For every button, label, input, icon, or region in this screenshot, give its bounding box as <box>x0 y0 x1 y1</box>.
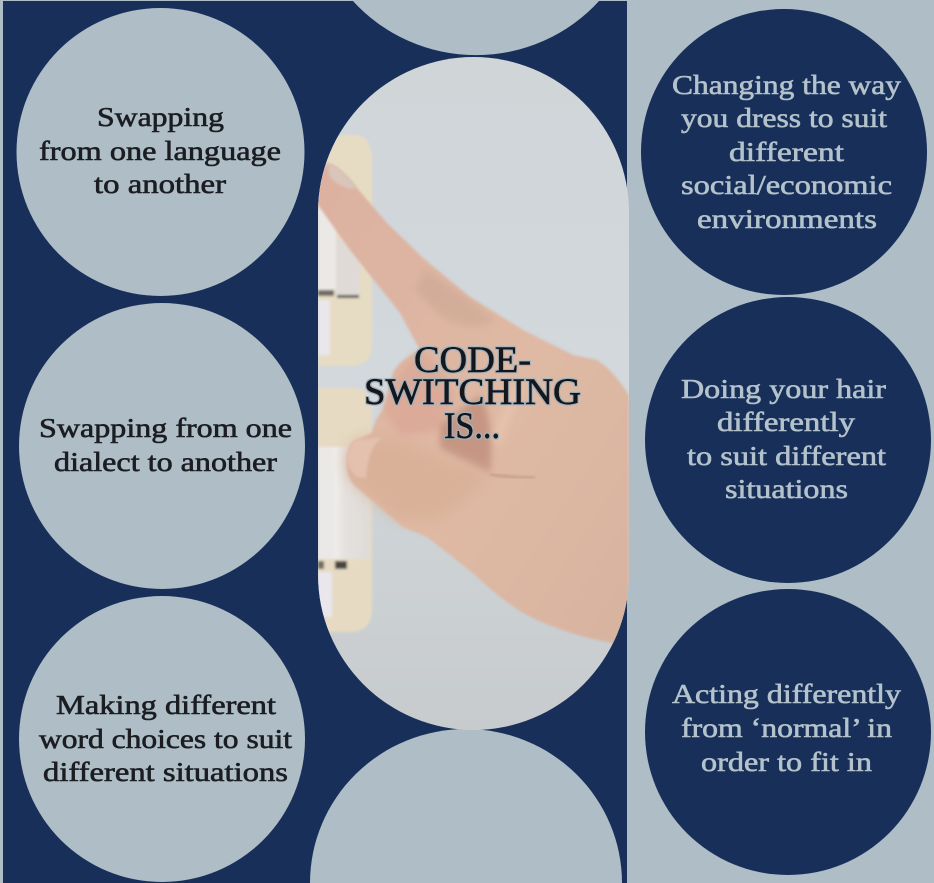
text: language: Swapping <box>97 102 224 132</box>
text: acting <box>672 679 902 777</box>
text: dialect <box>39 413 292 477</box>
text: acting: Acting differently <box>672 679 902 709</box>
title: code-switching is... <box>364 340 581 447</box>
text: language: from one language <box>39 136 281 166</box>
text: word choices: word choices to suit <box>39 724 293 754</box>
panel: navy left background <box>3 1 627 883</box>
title: code-switching is...: IS... <box>444 406 500 447</box>
circle: word choices <box>19 596 305 882</box>
circle: language <box>16 8 304 296</box>
text: hair: differently <box>717 407 856 437</box>
text: dress: environments <box>697 204 877 234</box>
circle: dialect <box>19 303 305 589</box>
decorative circle: bottom <box>310 729 622 883</box>
text: dress: you dress to suit <box>681 103 888 133</box>
text: dress: different <box>729 137 845 167</box>
finger shadows <box>383 352 455 436</box>
title: code-switching is...: SWITCHING <box>364 372 581 413</box>
text: acting: order to fit in <box>701 747 873 777</box>
text: acting: from ‘normal’ in <box>681 713 893 743</box>
circle: dress <box>641 9 927 295</box>
text: dress: Changing the way <box>672 70 902 100</box>
text: word choices: Making different <box>56 690 277 720</box>
text: dress <box>672 70 902 234</box>
decorative circle: top <box>352 0 600 55</box>
text: dialect: Swapping from one <box>39 413 292 443</box>
text: hair <box>681 374 887 504</box>
text: dress: social/economic <box>681 170 892 200</box>
circle: acting <box>645 589 931 875</box>
text: word choices <box>39 690 293 787</box>
text: language: to another <box>94 169 226 199</box>
text: hair: situations <box>725 474 848 504</box>
text: hair: Doing your hair <box>681 374 886 404</box>
text: word choices: different situations <box>43 757 288 787</box>
central photo: hand pressing switches <box>318 57 629 730</box>
hand <box>318 163 629 644</box>
text: hair: to suit different <box>687 441 887 471</box>
text: dialect: dialect to another <box>54 447 277 477</box>
circle: hair <box>645 297 931 583</box>
title: code-switching is...: CODE- <box>414 340 531 381</box>
text: language <box>39 102 281 199</box>
